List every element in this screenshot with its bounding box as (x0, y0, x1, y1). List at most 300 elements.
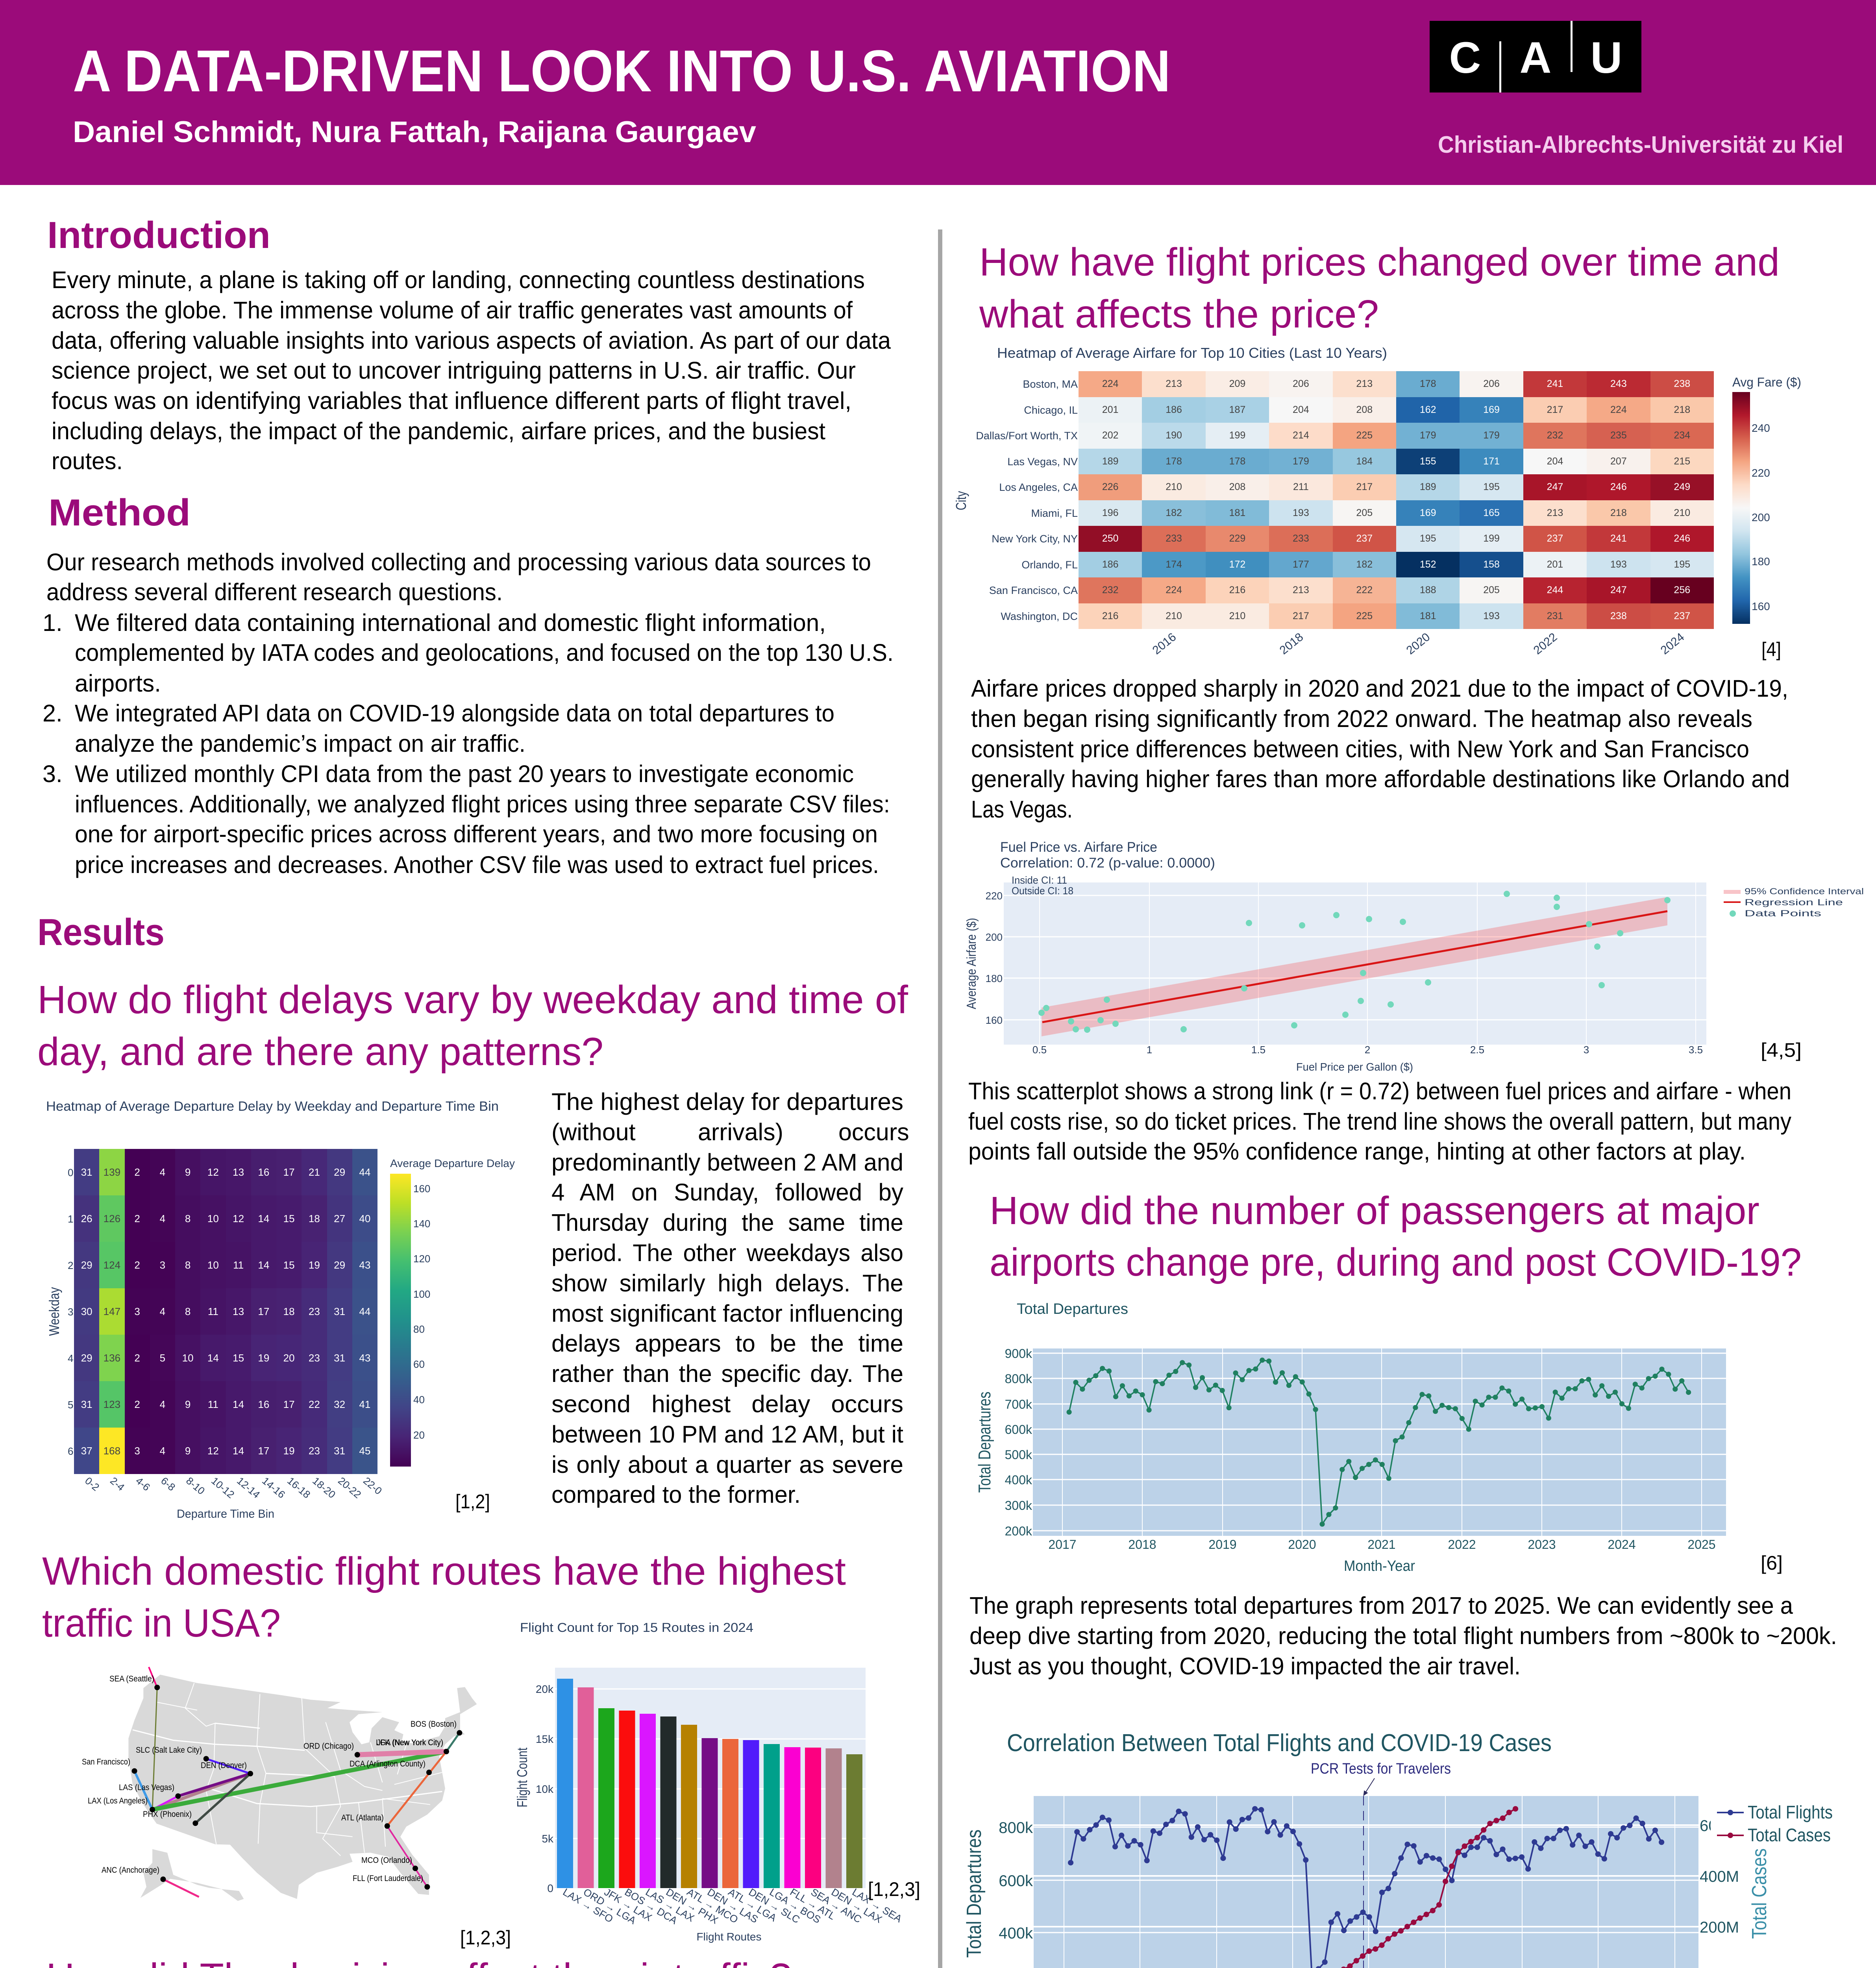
university name: Christian-Albrechts-Universität zu Kiel (1438, 131, 1843, 158)
chart: fuel price scatter: 2.5 (1470, 1044, 1484, 1056)
chart: departure delay heatmap: 14 (207, 1352, 219, 1363)
text block: delay explanation: between 10 PM and 12 AM, but it (551, 1421, 903, 1448)
chart: flights vs COVID cases: 800k (999, 1819, 1033, 1837)
chart: airfare heatmap: 216 (1102, 610, 1119, 621)
chart: departure delay heatmap: 2-4 (108, 1475, 127, 1493)
chart: total departures line: Total Departures (975, 1392, 994, 1493)
colorbar: 140 (413, 1218, 430, 1230)
chart: airfare heatmap: 165 (1483, 507, 1500, 518)
chart: airfare heatmap (953, 345, 1801, 657)
chart: total departures line: 2020 (1288, 1537, 1316, 1552)
chart: fuel price scatter: 2 (1365, 1044, 1370, 1056)
chart: airfare heatmap: 158 (1483, 559, 1500, 570)
chart: airfare heatmap: 231 (1547, 610, 1563, 621)
chart: flight count bars: DEN → LAX (829, 1886, 884, 1925)
chart: airfare heatmap: 217 (1356, 481, 1373, 492)
map labels: LAS (Las Vegas) (119, 1783, 174, 1792)
text block: scatter explanation: points fall outside the 95% confidence range, hinting at other factors at play. (968, 1138, 1746, 1165)
heading: flight delays question: How do flight delays vary by weekday and time of (37, 978, 908, 1022)
chart: departure delay heatmap: 18-20 (310, 1475, 338, 1500)
chart: total departures line: 200k (1005, 1524, 1032, 1538)
chart: departure delay heatmap: 10-12 (209, 1475, 237, 1500)
chart: total departures line: 600k (1005, 1422, 1032, 1437)
heading: routes question (42, 1549, 846, 1645)
text block: introduction: Every minute, a plane is taking off or landing, connecting countless destinations (52, 266, 865, 293)
chart: airfare heatmap: 225 (1356, 430, 1373, 441)
text block: method: price increases and decreases. Another CSV file was used to extract fuel prices. (75, 851, 879, 878)
text block: introduction: data, offering valuable insights into various aspects of aviation. As part of our data (52, 327, 891, 354)
chart: airfare heatmap: 204 (1293, 404, 1309, 415)
chart: departure delay heatmap: 26 (81, 1212, 93, 1224)
chart: departure delay heatmap: 31 (81, 1166, 93, 1178)
text block: method: complemented by IATA codes and geolocations, and focused on the top 130 U.S. (75, 639, 894, 666)
chart: airfare heatmap: 246 (1674, 533, 1690, 544)
chart: flights vs COVID cases (963, 1729, 1833, 1968)
chart: airfare heatmap: 162 (1420, 404, 1436, 415)
chart: flight count bars: BOS → DCA (623, 1886, 680, 1927)
map labels: SLC (Salt Lake City) (136, 1746, 202, 1755)
chart: departure delay heatmap: 29 (81, 1352, 93, 1363)
text block: method (43, 549, 894, 878)
chart: departure delay heatmap: 2 (134, 1398, 140, 1410)
chart: airfare heatmap: 199 (1483, 533, 1500, 544)
chart: airfare heatmap: 201 (1102, 404, 1119, 415)
chart: fuel price scatter: 160 (986, 1014, 1003, 1026)
chart: airfare heatmap: 172 (1229, 559, 1245, 570)
chart: route map (82, 1667, 477, 1901)
column divider (938, 229, 942, 1968)
chart: departure delay heatmap: 31 (81, 1398, 93, 1410)
chart: flights vs COVID cases: 600M (1700, 1817, 1739, 1835)
chart: departure delay heatmap: 126 (104, 1212, 120, 1224)
chart: fuel price scatter: 180 (986, 973, 1003, 984)
chart: departure delay heatmap: 136 (104, 1352, 120, 1363)
chart: airfare heatmap: 178 (1166, 456, 1182, 467)
chart: airfare heatmap: 215 (1674, 456, 1690, 467)
chart: airfare heatmap: 201 (1547, 559, 1563, 570)
chart: airfare heatmap: 189 (1420, 481, 1436, 492)
map labels: MCO (Orlando) (361, 1856, 412, 1865)
chart: airfare heatmap: 232 (1102, 584, 1119, 596)
chart: departure delay heatmap: 1 (68, 1213, 73, 1225)
chart: airfare heatmap: 195 (1674, 559, 1690, 570)
text block: introduction: science project, we set out to uncover intriguing patterns in U.S. air traffic. Our (52, 357, 856, 384)
chart: departure delay heatmap: 32 (334, 1398, 345, 1410)
chart: airfare heatmap: 195 (1420, 533, 1436, 544)
chart: airfare heatmap: 181 (1420, 610, 1436, 621)
colorbar: 160 (1752, 600, 1770, 612)
chart: flights vs COVID cases: 400M (1700, 1868, 1739, 1885)
colorbar: 120 (413, 1253, 430, 1265)
chart: fuel price scatter: Fuel Price per Gallon ($) (1296, 1061, 1413, 1073)
heading: Method: Method (48, 492, 191, 534)
chart: airfare heatmap: 189 (1102, 456, 1119, 467)
colorbar (1732, 375, 1801, 624)
map labels: JFK (New York City) (377, 1738, 443, 1747)
chart: departure delay heatmap: Weekday (46, 1287, 62, 1336)
text block: airfare explanation (971, 675, 1790, 823)
text block: delay explanation: arrivals) (698, 1119, 783, 1145)
colorbar: 240 (1752, 422, 1770, 434)
chart: departure delay heatmap: 2 (134, 1166, 140, 1178)
chart: fuel price scatter (964, 840, 1864, 1073)
chart: departure delay heatmap: 14 (233, 1445, 244, 1456)
chart: flights vs COVID cases: Total Cases (1748, 1848, 1771, 1939)
chart: departure delay heatmap: 14 (233, 1398, 244, 1410)
chart: departure delay heatmap: 0 (68, 1167, 73, 1178)
chart: flight count bars: ORD → LGA (581, 1886, 638, 1927)
chart: departure delay heatmap: 139 (104, 1166, 120, 1178)
chart: departure delay heatmap: 10 (207, 1212, 219, 1224)
chart: airfare heatmap: 179 (1420, 430, 1436, 441)
colorbar (390, 1157, 515, 1467)
map labels: DCA (Arlington County) (350, 1759, 426, 1768)
chart: airfare heatmap: 196 (1102, 507, 1119, 518)
heading: flight prices question (979, 240, 1780, 336)
chart: airfare heatmap: 179 (1483, 430, 1500, 441)
chart: airfare heatmap: 2016 (1150, 631, 1179, 657)
chart: airfare heatmap: Boston, MA (1023, 378, 1078, 390)
icon: CAU logo: A (1520, 33, 1551, 82)
chart: fuel price scatter: Correlation: 0.72 (p-value: 0.0000) (1000, 855, 1215, 871)
text block: delay explanation: (without (551, 1119, 636, 1145)
text block: departures explanation: deep dive starting from 2020, reducing the total flight numbers from ~800k to ~200k. (969, 1622, 1837, 1649)
chart: airfare heatmap: 234 (1674, 430, 1690, 441)
chart: flights vs COVID cases: Correlation Between Total Flights and COVID-19 Cases (1007, 1729, 1552, 1757)
chart: departure delay heatmap: 30 (81, 1305, 93, 1317)
chart: airfare heatmap: 2024 (1658, 631, 1687, 657)
chart: airfare heatmap: 247 (1547, 481, 1563, 492)
heading: Results: Results (37, 911, 165, 953)
icon: CAU logo: C (1449, 33, 1481, 82)
chart: airfare heatmap: 190 (1166, 430, 1182, 441)
chart: departure delay heatmap: 19 (283, 1445, 295, 1456)
chart: airfare heatmap: Heatmap of Average Airfare for Top 10 Cities (Last 10 Years) (997, 345, 1387, 361)
heading: passengers question: airports change pre, during and post COVID-19? (990, 1240, 1802, 1284)
chart: departure delay heatmap: 4 (160, 1212, 165, 1224)
chart: departure delay heatmap: 22 (309, 1398, 320, 1410)
text block: method: influences. Additionally, we analyzed flight prices using three separate CSV files: (75, 791, 890, 818)
chart: airfare heatmap: 205 (1356, 507, 1373, 518)
chart: total departures line: 800k (1005, 1372, 1032, 1386)
chart: airfare heatmap: 237 (1674, 610, 1690, 621)
chart: departure delay heatmap: 15 (233, 1352, 244, 1363)
chart: airfare heatmap: 171 (1483, 456, 1500, 467)
text block: method: 2. (43, 700, 63, 727)
chart: departure delay heatmap: 37 (81, 1445, 93, 1456)
map labels: LGA (New York City) (376, 1738, 443, 1747)
chart: fuel price scatter: 0.5 (1032, 1044, 1047, 1056)
heading: flight delays question: day, and are there any patterns? (37, 1030, 603, 1074)
chart: departure delay heatmap: 16-18 (285, 1475, 313, 1500)
map labels: LAX (Los Angeles) (88, 1796, 148, 1805)
authors: Daniel Schmidt, Nura Fattah, Raijana Gaurgaev (73, 115, 756, 149)
chart: airfare heatmap: 193 (1610, 559, 1627, 570)
chart: departure delay heatmap: 17 (283, 1166, 295, 1178)
chart: departure delay heatmap: Departure Time Bin (177, 1507, 274, 1520)
chart: flight count bars: 10k (536, 1783, 554, 1795)
text block: airfare explanation: Las Vegas. (971, 796, 1073, 823)
colorbar: Avg Fare ($) (1732, 375, 1801, 389)
chart: flight count bars (514, 1620, 904, 1943)
chart: departure delay heatmap: 31 (334, 1305, 345, 1317)
text block: delay explanation (551, 1088, 909, 1508)
chart: departure delay heatmap: 41 (359, 1398, 370, 1410)
chart: airfare heatmap: 210 (1166, 610, 1182, 621)
chart: airfare heatmap: 214 (1293, 430, 1309, 441)
chart: airfare heatmap: 2018 (1277, 631, 1306, 657)
chart: departure delay heatmap: 5 (68, 1399, 73, 1411)
chart: airfare heatmap: Chicago, IL (1024, 404, 1078, 416)
chart: airfare heatmap: San Francisco, CA (989, 584, 1078, 596)
chart: departure delay heatmap: 11 (233, 1259, 244, 1271)
chart: airfare heatmap: 208 (1229, 481, 1245, 492)
chart: airfare heatmap: Los Angeles, CA (999, 481, 1078, 493)
chart: airfare heatmap: 186 (1102, 559, 1119, 570)
chart: departure delay heatmap: 27 (334, 1212, 345, 1224)
chart: total departures line: 2024 (1608, 1537, 1636, 1552)
chart: departure delay heatmap: 8 (185, 1259, 191, 1271)
text block: method: 3. (43, 760, 63, 787)
text block: method: airports. (75, 670, 161, 697)
chart: flight count bars: DEN → LAS (705, 1886, 760, 1925)
chart: total departures line: 300k (1005, 1498, 1032, 1513)
heading: Introduction: Introduction (47, 214, 270, 256)
chart: departure delay heatmap: 6-8 (159, 1475, 178, 1493)
text block: airfare explanation: generally having higher fares than more affordable destinations like Orlando and (971, 766, 1790, 792)
chart: airfare heatmap: 169 (1483, 404, 1500, 415)
map labels: PHX (Phoenix) (143, 1810, 192, 1819)
chart: flight count bars: ATL → MCO (685, 1886, 740, 1925)
chart: airfare heatmap: 238 (1610, 610, 1627, 621)
chart: departure delay heatmap: 19 (309, 1259, 320, 1271)
chart: departure delay heatmap: 29 (81, 1259, 93, 1271)
chart: airfare heatmap: 222 (1356, 584, 1373, 596)
chart: departure delay heatmap: 19 (258, 1352, 269, 1363)
chart: flight count bars: DEN → SLC (747, 1886, 802, 1925)
colorbar: 200 (1752, 511, 1770, 523)
citation: [1,2,3] (868, 1878, 920, 1900)
map labels: SEA (Seattle) (109, 1674, 154, 1683)
chart: departure delay heatmap: 2 (134, 1259, 140, 1271)
chart: total departures line: 2025 (1687, 1537, 1716, 1552)
chart: flights vs COVID cases: 400k (999, 1925, 1033, 1942)
chart: airfare heatmap: 217 (1293, 610, 1309, 621)
chart: airfare heatmap: 241 (1547, 378, 1563, 389)
chart: departure delay heatmap: 31 (334, 1445, 345, 1456)
chart: departure delay heatmap: 31 (334, 1352, 345, 1363)
heading: flight prices question: what affects the price? (979, 292, 1379, 336)
chart: departure delay heatmap: 21 (309, 1166, 320, 1178)
chart: flight count bars: SEA → ANC (809, 1886, 864, 1925)
chart: flight count bars: LAX → SEA (850, 1886, 904, 1925)
annotation: PCR tests (1311, 1761, 1451, 1968)
chart: departure delay heatmap: 4 (160, 1445, 165, 1456)
text block: scatter explanation: This scatterplot shows a strong link (r = 0.72) between fuel prices and airfare - when (968, 1078, 1791, 1104)
chart: airfare heatmap: 249 (1674, 481, 1690, 492)
chart: total departures line: 700k (1005, 1397, 1032, 1411)
icon: CAU logo (1430, 21, 1641, 92)
chart: airfare heatmap: 218 (1610, 507, 1627, 518)
chart: departure delay heatmap: 9 (185, 1398, 191, 1410)
chart: airfare heatmap: 235 (1610, 430, 1627, 441)
chart: departure delay heatmap: 8 (185, 1305, 191, 1317)
icon: CAU logo: U (1591, 33, 1622, 82)
chart: airfare heatmap: 226 (1102, 481, 1119, 492)
chart: departure delay heatmap: 8 (185, 1212, 191, 1224)
chart: departure delay heatmap: 20-22 (336, 1475, 363, 1500)
chart: airfare heatmap: 256 (1674, 584, 1690, 596)
chart: airfare heatmap: 199 (1229, 430, 1245, 441)
chart: departure delay heatmap: 29 (334, 1259, 345, 1271)
citation: [1,2,3] (460, 1927, 511, 1949)
chart: departure delay heatmap: 44 (359, 1166, 370, 1178)
chart: departure delay heatmap: 22-0 (361, 1475, 384, 1497)
map labels: BOS (Boston) (411, 1720, 457, 1729)
colorbar: 220 (1752, 467, 1770, 479)
chart: airfare heatmap: 210 (1674, 507, 1690, 518)
text block: delay explanation: most significant factor influencing (551, 1300, 903, 1327)
chart: departure delay heatmap: 17 (258, 1305, 269, 1317)
chart: departure delay heatmap: 10 (207, 1259, 219, 1271)
heading: flight delays question (37, 978, 908, 1074)
chart: fuel price scatter: Outside CI: 18 (1012, 885, 1073, 897)
chart: airfare heatmap: 237 (1547, 533, 1563, 544)
chart: departure delay heatmap: 9 (185, 1445, 191, 1456)
chart: departure delay heatmap: 18 (283, 1305, 295, 1317)
map labels: DEN (Denver) (201, 1761, 247, 1770)
chart: departure delay heatmap: 15 (283, 1212, 295, 1224)
heading: routes question: Which domestic flight routes have the highest (42, 1549, 846, 1593)
text block: departures explanation: Just as you thought, COVID-19 impacted the air travel. (969, 1653, 1521, 1679)
text block: airfare explanation: then began rising significantly from 2022 onward. The heatmap also reveals (971, 705, 1752, 732)
chart: departure delay heatmap: 17 (258, 1445, 269, 1456)
text block: method: We utilized monthly CPI data from the past 20 years to investigate economic (75, 760, 854, 787)
chart: flight count bars: ATL → LGA (726, 1886, 779, 1924)
chart: departure delay heatmap: 3 (134, 1305, 140, 1317)
chart: airfare heatmap: 237 (1356, 533, 1373, 544)
text block: delay explanation: second highest delay occurs (551, 1391, 903, 1417)
chart: departure delay heatmap: 168 (104, 1445, 120, 1456)
chart: fuel price scatter: 200 (986, 931, 1003, 943)
chart: airfare heatmap: 233 (1293, 533, 1309, 544)
chart: departure delay heatmap: 16 (258, 1166, 269, 1178)
chart: airfare heatmap: 188 (1420, 584, 1436, 596)
chart: airfare heatmap: 206 (1293, 378, 1309, 389)
chart: departure delay heatmap: 6 (68, 1445, 73, 1457)
chart: flight count bars: LAS → LAX (644, 1886, 696, 1924)
chart: departure delay heatmap: 147 (104, 1305, 120, 1317)
chart: airfare heatmap: 238 (1674, 378, 1690, 389)
chart: airfare heatmap: 247 (1610, 584, 1627, 596)
chart: airfare heatmap: 169 (1420, 507, 1436, 518)
chart: departure delay heatmap: 40 (359, 1212, 370, 1224)
chart: departure delay heatmap: 29 (334, 1166, 345, 1178)
chart: total departures line: 2022 (1448, 1537, 1476, 1552)
chart: departure delay heatmap: 23 (309, 1352, 320, 1363)
chart: departure delay heatmap: 23 (309, 1305, 320, 1317)
chart: flight count bars: FLL → ATL (788, 1886, 838, 1922)
legend: Total Cases (1748, 1825, 1831, 1845)
colorbar: 80 (413, 1323, 425, 1335)
chart: airfare heatmap: 225 (1356, 610, 1373, 621)
legend (1724, 886, 1864, 918)
chart: total departures line: Month-Year (1344, 1558, 1415, 1574)
chart: departure delay heatmap: 3 (68, 1306, 73, 1318)
chart: departure delay heatmap: 43 (359, 1352, 370, 1363)
chart: airfare heatmap: 204 (1547, 456, 1563, 467)
chart: departure delay heatmap: 12-14 (235, 1475, 262, 1500)
chart: fuel price scatter: 3.5 (1689, 1044, 1703, 1056)
text block: method: Our research methods involved collecting and processing various data sources to (46, 549, 871, 575)
chart: departure delay heatmap: 4-6 (133, 1475, 152, 1493)
chart: airfare heatmap: 243 (1610, 378, 1627, 389)
text block: delay explanation: predominantly between 2 AM and (551, 1149, 903, 1176)
chart: fuel price scatter: Fuel Price vs. Airfare Price (1000, 840, 1157, 855)
chart: airfare heatmap: City (953, 491, 969, 510)
map labels: ORD (Chicago) (303, 1742, 354, 1751)
chart: departure delay heatmap: 17 (283, 1398, 295, 1410)
chart: flight count bars: Flight Routes (697, 1931, 761, 1943)
text block: delay explanation: period. The other weekdays also (551, 1239, 903, 1266)
text block: method: We integrated API data on COVID-19 alongside data on total departures to (75, 700, 834, 727)
chart: airfare heatmap: 250 (1102, 533, 1119, 544)
text block: delay explanation: compared to the former. (551, 1481, 801, 1508)
chart: departure delay heatmap: 9 (185, 1166, 191, 1178)
chart: airfare heatmap: 246 (1610, 481, 1627, 492)
chart: departure delay heatmap: 18 (309, 1212, 320, 1224)
chart: departure delay heatmap: 2 (68, 1260, 73, 1271)
chart: airfare heatmap: 182 (1166, 507, 1182, 518)
chart: departure delay heatmap: 124 (104, 1259, 120, 1271)
line: total flights (1071, 1809, 1661, 1968)
heading: passengers question: How did the number of passengers at major (990, 1189, 1759, 1233)
chart: airfare heatmap: Miami, FL (1031, 507, 1078, 519)
chart: departure delay heatmap: 12 (207, 1166, 219, 1178)
chart: departure delay heatmap: 3 (160, 1259, 165, 1271)
chart: airfare heatmap: 184 (1356, 456, 1373, 467)
chart: departure delay heatmap: 13 (233, 1305, 244, 1317)
chart: departure delay heatmap: 2 (134, 1352, 140, 1363)
colorbar: 60 (413, 1358, 425, 1370)
chart: fuel price scatter: 3 (1584, 1044, 1589, 1056)
legend: Total Flights (1748, 1802, 1833, 1822)
chart: airfare heatmap: 206 (1483, 378, 1500, 389)
chart: departure delay heatmap: 11 (208, 1305, 218, 1317)
text block: method: We filtered data containing international and domestic flight information, (75, 609, 826, 636)
text block: method: 1. (43, 609, 63, 636)
chart: airfare heatmap: 152 (1420, 559, 1436, 570)
chart: flight count bars: 0 (547, 1882, 553, 1894)
map labels: San Francisco) (82, 1757, 130, 1766)
chart: airfare heatmap: 2022 (1531, 631, 1560, 657)
chart: flight count bars: LGA → BOS (768, 1886, 823, 1925)
annotation: PCR tests: PCR Tests for Travelers (1311, 1761, 1451, 1777)
text block: method: analyze the pandemic’s impact on air traffic. (75, 730, 525, 757)
chart: departure delay heatmap: 23 (309, 1445, 320, 1456)
chart: airfare heatmap: 244 (1547, 584, 1563, 596)
chart: airfare heatmap: 224 (1610, 404, 1627, 415)
chart: airfare heatmap: Washington, DC (1001, 610, 1078, 622)
chart: airfare heatmap: 213 (1166, 378, 1182, 389)
chart: flight count bars: Flight Count (514, 1748, 530, 1807)
legend: 95% Confidence Interval (1745, 886, 1864, 896)
chart: departure delay heatmap: 4 (68, 1352, 73, 1364)
chart: departure delay heatmap: 44 (359, 1305, 370, 1317)
colorbar: 100 (413, 1288, 430, 1300)
chart: total departures line: 2018 (1128, 1537, 1156, 1552)
chart: departure delay heatmap: 3 (134, 1445, 140, 1456)
